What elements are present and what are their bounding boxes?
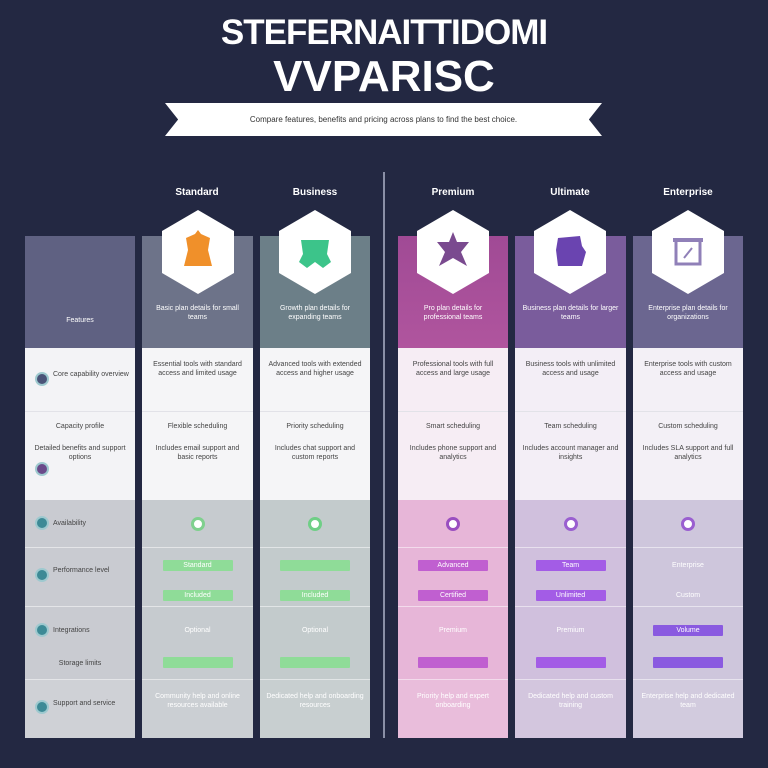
- column 5: Volume: [676, 627, 700, 634]
- icon: magenta hexagon: [417, 210, 489, 294]
- column 4: Team: [562, 562, 579, 569]
- column 4: Business plan details for larger teams: [523, 305, 618, 321]
- column headings: [175, 187, 713, 198]
- column 3: Advanced: [437, 562, 469, 569]
- column 3: Smart scheduling: [426, 423, 480, 430]
- column 1: Includes email support and basic reports: [156, 445, 239, 461]
- column: labels: Capacity profile: [56, 423, 104, 430]
- column: labels: Availability: [53, 520, 86, 527]
- text: Ultimate: [550, 187, 590, 198]
- column 5: Custom scheduling: [658, 423, 718, 430]
- column 4: Includes account manager and insights: [523, 445, 618, 461]
- column 1: [142, 236, 253, 738]
- column: labels: Detailed benefits and support options: [34, 445, 126, 461]
- column 4: Premium: [556, 627, 584, 634]
- column 4: Business tools with unlimited access and usage: [526, 361, 615, 377]
- column 1: Community help and online resources available: [155, 693, 240, 709]
- column: labels: Support and service: [53, 700, 115, 707]
- column 5: Enterprise tools with custom access and usage: [644, 361, 732, 377]
- column 2: Included: [302, 592, 328, 599]
- column 1: Standard: [183, 562, 212, 569]
- title: STEFERNAITTIDOMI: [221, 13, 547, 52]
- column 1: Flexible scheduling: [168, 423, 227, 430]
- column: labels: Storage limits: [59, 660, 101, 667]
- text: Business: [293, 187, 337, 198]
- icon: lavender hexagon: [652, 210, 724, 294]
- text: Enterprise: [663, 187, 713, 198]
- column 1: Essential tools with standard access and limited usage: [153, 361, 242, 377]
- column 1: Basic plan details for small teams: [156, 305, 239, 321]
- column 3: Premium: [439, 627, 467, 634]
- column 5: Enterprise help and dedicated team: [641, 693, 734, 709]
- column 4: Dedicated help and custom training: [528, 693, 613, 709]
- icon: purple hexagon: [534, 210, 606, 294]
- column: labels: Core capability overview: [53, 371, 129, 378]
- column 3: Pro plan details for professional teams: [424, 305, 482, 321]
- column 2: Advanced tools with extended access and higher usage: [268, 361, 362, 377]
- column: labels: Features: [66, 317, 94, 324]
- column 3: Priority help and expert onboarding: [417, 693, 489, 709]
- column: labels: Performance level: [53, 567, 109, 574]
- column 5: Enterprise plan details for organizations: [648, 305, 728, 321]
- column 2: [260, 236, 370, 738]
- column: labels: Integrations: [53, 627, 90, 634]
- text: Standard: [175, 187, 219, 198]
- subtitle ribbon: Compare features, benefits and pricing across plans to find the best choice.: [250, 115, 517, 124]
- column 3: Includes phone support and analytics: [410, 445, 496, 461]
- column 5: [633, 236, 743, 738]
- column 3: [398, 236, 508, 738]
- text: Premium: [432, 187, 474, 198]
- column: labels: [25, 236, 135, 738]
- subtitle ribbon: [165, 103, 602, 136]
- column 5: Custom: [676, 592, 700, 599]
- column 4: [515, 236, 626, 738]
- divider: [383, 172, 385, 738]
- column 2: Dedicated help and onboarding resources: [266, 693, 364, 709]
- column 5: Enterprise: [672, 562, 704, 569]
- column 2: Includes chat support and custom reports: [275, 445, 355, 461]
- column 4: Team scheduling: [544, 423, 597, 430]
- title: VVPARISC: [273, 52, 495, 101]
- icon: green hexagon: [279, 210, 351, 294]
- title: [221, 13, 547, 101]
- column 4: Unlimited: [556, 592, 585, 599]
- column 2: Optional: [302, 627, 328, 634]
- column 3: Professional tools with full access and large usage: [413, 361, 493, 377]
- column 5: Includes SLA support and full analytics: [643, 445, 733, 461]
- column 2: Growth plan details for expanding teams: [280, 305, 350, 321]
- column 3: Certified: [440, 592, 466, 599]
- column 1: Included: [184, 592, 211, 599]
- column 2: Priority scheduling: [286, 423, 344, 430]
- icon: orange hexagon: [162, 210, 234, 294]
- column 1: Optional: [184, 627, 211, 634]
